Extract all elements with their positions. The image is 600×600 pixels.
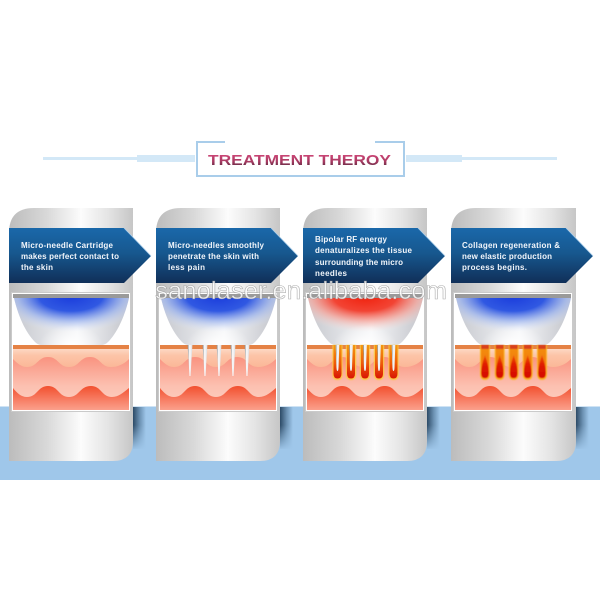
step text: new elastic production [462,252,552,261]
watermark: sanolaser.en.alibaba.com [155,277,447,305]
card body [303,208,427,461]
skin layers [13,345,129,410]
step text: Micro-needle Cartridge [21,241,114,250]
step text [315,235,413,278]
step text: denaturalizes the tissue [315,246,413,255]
right connector line [406,155,557,162]
title text: TREATMENT THEROY [208,152,391,169]
card shadow [133,407,146,450]
skin layers [160,345,276,410]
panel: step 1 [9,208,151,461]
heated needles [332,345,398,380]
header arrow [156,228,298,283]
step text [168,241,265,272]
applicator head, blue [454,292,572,412]
step text: process begins. [462,263,527,272]
coagulation columns [480,345,547,380]
step text [462,241,560,272]
step text [21,241,119,272]
step text: makes perfect contact to [21,252,119,261]
header arrow [303,228,445,283]
blue floor band [0,406,600,480]
step text: Bipolar RF energy [315,235,388,244]
left connector line [43,155,195,162]
title banner [43,142,557,176]
card shadow [576,407,589,450]
step text: penetrate the skin with [168,252,259,261]
panel: step 4 [451,208,593,461]
panel: step 3 [303,208,445,461]
applicator head, blue [12,292,130,412]
applicator head, blue [158,292,278,412]
panel: step 2 [156,208,298,461]
skin layers [307,345,423,410]
step text: the skin [21,263,53,272]
card shadow [280,407,293,450]
step text: surrounding the micro [315,258,403,267]
card body [451,208,576,461]
step text: less pain [168,263,205,272]
title frame [197,142,404,176]
step text: Collagen regeneration & [462,241,560,250]
skin layers [455,345,571,410]
step text: needles [315,269,348,278]
card body [156,208,280,461]
header arrow [451,228,593,283]
header arrow [9,228,151,283]
card body [9,208,133,461]
step text: Micro-needles smoothly [168,241,265,250]
micro-needles [188,345,249,376]
card shadow [427,407,440,450]
applicator head, red [306,292,424,412]
